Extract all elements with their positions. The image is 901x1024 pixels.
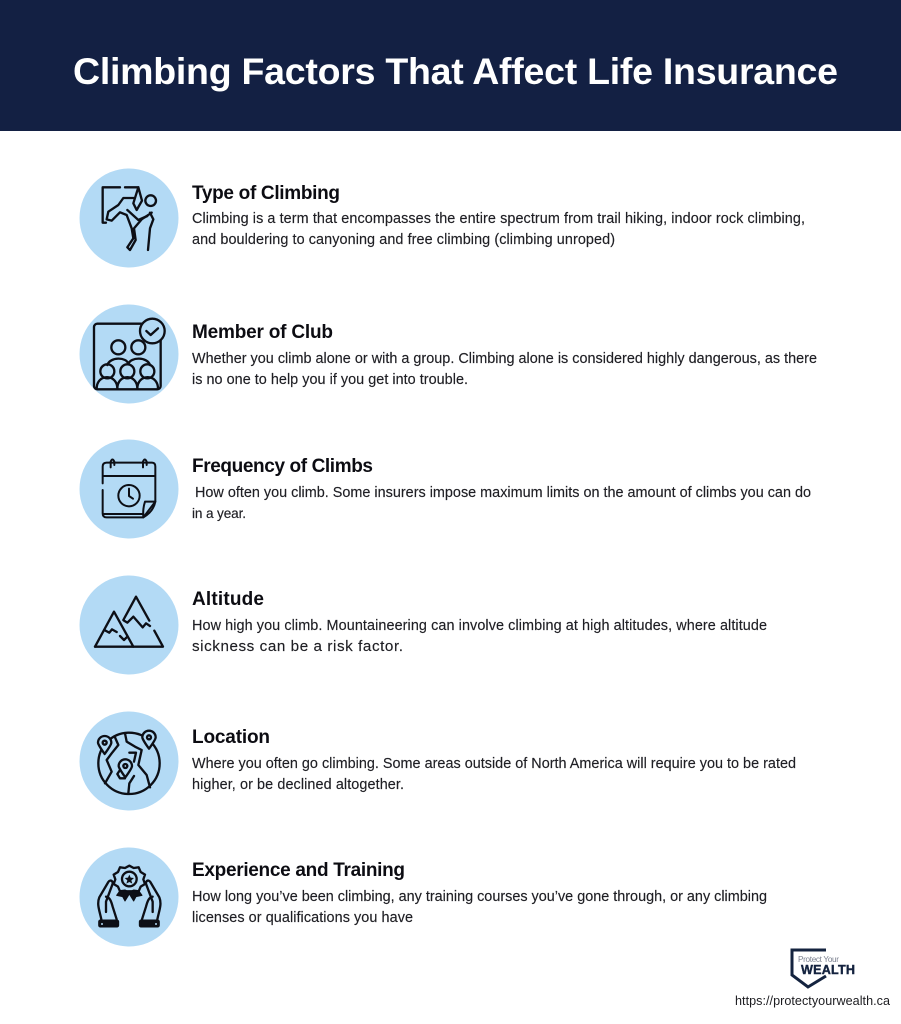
header band: [0, 0, 901, 131]
text: Location: higher, or be declined altogether.: [192, 777, 404, 793]
icon: club members: [80, 304, 178, 404]
website url: https://protectyourwealth.ca: [735, 994, 890, 1008]
text: Experience and Training: How long you’ve been climbing, any training courses you’ve gone through, or any climbing: [192, 889, 767, 905]
icon: calendar with clock: [80, 440, 178, 538]
text: Frequency of Climbs: in a year.: [192, 506, 246, 521]
text: Altitude: How high you climb. Mountaineering can involve climbing at high altitudes, where altitude: [192, 618, 767, 634]
icon: mountains: [80, 576, 178, 674]
text: Experience and Training: [192, 860, 767, 926]
text: Location: Location: [192, 727, 270, 748]
title: Climbing Factors That Affect Life Insurance: [73, 50, 838, 92]
text: Type of Climbing: [192, 183, 805, 248]
text: Altitude: Altitude: [192, 589, 264, 610]
text: Experience and Training: licenses or qualifications you have: [192, 910, 413, 926]
text: Frequency of Climbs: [192, 456, 811, 521]
icon: hands holding award: [80, 848, 178, 946]
text: Member of Club: is no one to help you if you get into trouble.: [192, 372, 468, 388]
logo: Protect Your Wealth: Protect Your: [798, 955, 839, 964]
text: Location: Where you often go climbing. Some areas outside of North America will require you to be rated: [192, 756, 796, 772]
text: Type of Climbing: Type of Climbing: [192, 183, 340, 204]
text: Type of Climbing: and bouldering to canyoning and free climbing (climbing unroped): [192, 232, 615, 248]
text: Location: [192, 727, 796, 793]
icon: climber: [80, 168, 178, 268]
logo: Protect Your Wealth: WEALTH: [801, 963, 855, 977]
text: Member of Club: Member of Club: [192, 322, 333, 343]
text: Frequency of Climbs: How often you climb. Some insurers impose maximum limits on the amount of climbs you can do: [195, 485, 811, 501]
text: Type of Climbing: Climbing is a term that encompasses the entire spectrum from trail hiking, indoor rock climbing,: [192, 211, 805, 227]
text: Altitude: sickness can be a risk factor.: [192, 638, 403, 655]
logo: Protect Your Wealth: [792, 950, 855, 987]
icon: globe with pins: [80, 712, 178, 810]
text: Experience and Training: Experience and Training: [192, 860, 405, 881]
text: Member of Club: [192, 322, 817, 388]
text: Frequency of Climbs: Frequency of Climbs: [192, 456, 373, 477]
icon: shield: [792, 950, 826, 987]
text: Altitude: [192, 589, 767, 655]
text: Member of Club: Whether you climb alone or with a group. Climbing alone is considered highly dangerous, as there: [192, 351, 817, 367]
